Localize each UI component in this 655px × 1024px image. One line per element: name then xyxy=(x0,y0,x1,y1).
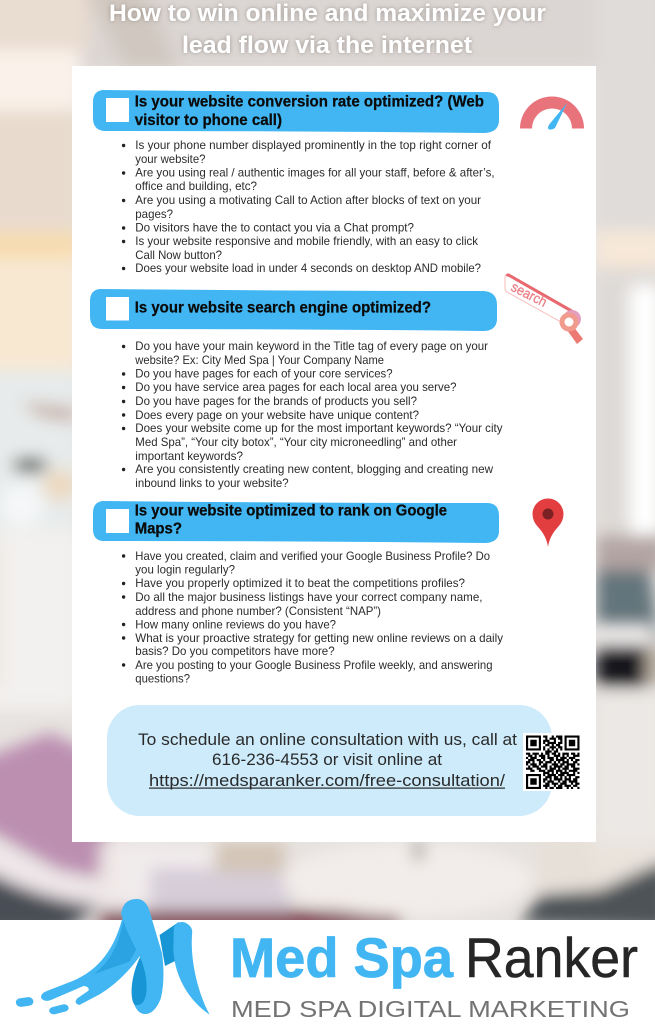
bullet list: google maps: Are you posting to your Google Business Profile weekly, and answering xyxy=(135,658,493,672)
bullet list: search engine: Do you have service area pages for each local area you serve? xyxy=(135,380,457,394)
bullet list: conversion rate: your website? xyxy=(135,152,206,166)
heading bar: search engine: Is your website search engine optimized? xyxy=(135,300,431,316)
bullet list: search engine: Do you have pages for the brands of products you sell? xyxy=(135,394,417,408)
bullet list: conversion rate: Do visitors have the to contact you via a Chat prompt? xyxy=(135,220,414,234)
bullet list: search engine: inbound links to your website? xyxy=(135,476,289,490)
QR code xyxy=(523,733,581,791)
callout: schedule consultation xyxy=(107,705,552,816)
bullet list: google maps: basis? Do you competitors have more? xyxy=(135,644,335,658)
bullet list: search engine: Med Spa”, “Your city botox”, “Your city microneedling” and other xyxy=(135,435,457,449)
icon: search bar with magnifier: search xyxy=(509,278,550,310)
bullet list: conversion rate: Is your website responsive and mobile friendly, with an easy to click xyxy=(135,234,479,248)
heading bar: google maps: Maps? xyxy=(135,520,182,538)
bullet list: search engine: Do you have your main keyword in the Title tag of every page on your xyxy=(135,339,488,353)
heading bar: google maps: Is your website optimized to rank on Google xyxy=(135,502,447,520)
bullet list: google maps xyxy=(122,549,503,686)
heading bar: search engine xyxy=(90,289,497,331)
heading bar: conversion rate: visitor to phone call) xyxy=(135,112,282,129)
bullet list: conversion rate: Does your website load in under 4 seconds on desktop AND mobile? xyxy=(135,261,481,275)
section: conversion rate xyxy=(93,90,584,275)
bullet list: conversion rate: pages? xyxy=(135,207,173,221)
bullet list: conversion rate: Is your phone number displayed prominently in the top right corner of xyxy=(135,138,492,152)
bullet list: search engine: Does every page on your website have unique content? xyxy=(135,408,419,422)
bullet list: google maps: How many online reviews do you have? xyxy=(135,617,336,631)
bullet list: search engine: website? Ex: City Med Spa | Your Company Name xyxy=(134,353,384,367)
icon: map pin xyxy=(532,498,564,547)
heading bar: conversion rate xyxy=(93,90,499,133)
bullet list: google maps: Have you properly optimized it to beat the competitions profiles? xyxy=(135,576,465,590)
icon: speedometer gauge xyxy=(520,96,584,130)
callout: schedule consultation: https://medsparanker.com/free-consultation/ xyxy=(149,771,505,790)
bullet list: google maps: Do all the major business listings have your correct company name, xyxy=(135,590,483,604)
title: How to win online and maximize your xyxy=(109,0,546,27)
panel: checklist card xyxy=(72,66,596,842)
heading bar: conversion rate: Is your website conversion rate optimized? (Web xyxy=(135,94,484,110)
logo wordmark: Med Spa: Med Spa xyxy=(230,926,454,989)
section: google maps xyxy=(93,498,564,686)
icon: search bar with magnifier xyxy=(505,273,583,344)
bullet list: google maps: Have you created, claim and verified your Google Business Profile? Do xyxy=(135,549,490,563)
callout: schedule consultation: 616-236-4553 or visit online at xyxy=(212,750,442,769)
bullet list: google maps: What is your proactive strategy for getting new online reviews on a daily xyxy=(135,631,503,645)
bullet list: search engine: Do you have pages for each of your core services? xyxy=(135,367,393,381)
bullet list: search engine: Are you consistently creating new content, blogging and creating new xyxy=(135,462,493,476)
bullet list: google maps: address and phone number? (Consistent “NAP”) xyxy=(135,604,381,618)
bullet list: conversion rate: Are you using a motivating Call to Action after blocks of text on your xyxy=(135,193,481,207)
bullet list: search engine: Does your website come up for the most important keywords? “Your city xyxy=(135,421,503,435)
footer: logo band xyxy=(0,899,655,1024)
title xyxy=(109,0,546,59)
bullet list: google maps: you login regularly? xyxy=(135,562,235,576)
bullet list: conversion rate: Are you using real / authentic images for all your staff, before & after’s, xyxy=(135,166,495,180)
bullet list: conversion rate: Call Now button? xyxy=(135,248,222,262)
heading bar: google maps xyxy=(93,501,499,543)
bullet list: search engine: important keywords? xyxy=(135,449,243,463)
bullet list: search engine xyxy=(122,339,503,490)
logo mark xyxy=(15,899,210,1015)
bullet list: google maps: questions? xyxy=(135,672,190,686)
logo wordmark: Ranker: Ranker xyxy=(465,926,638,989)
section: search engine xyxy=(90,273,583,490)
callout: schedule consultation: To schedule an online consultation with us, call at xyxy=(138,730,517,749)
bullet list: conversion rate: office and building, etc? xyxy=(135,179,257,193)
tagline: MED SPA DIGITAL MARKETING xyxy=(231,996,630,1022)
bullet list: conversion rate xyxy=(122,138,495,275)
title: lead flow via the internet xyxy=(182,32,472,59)
